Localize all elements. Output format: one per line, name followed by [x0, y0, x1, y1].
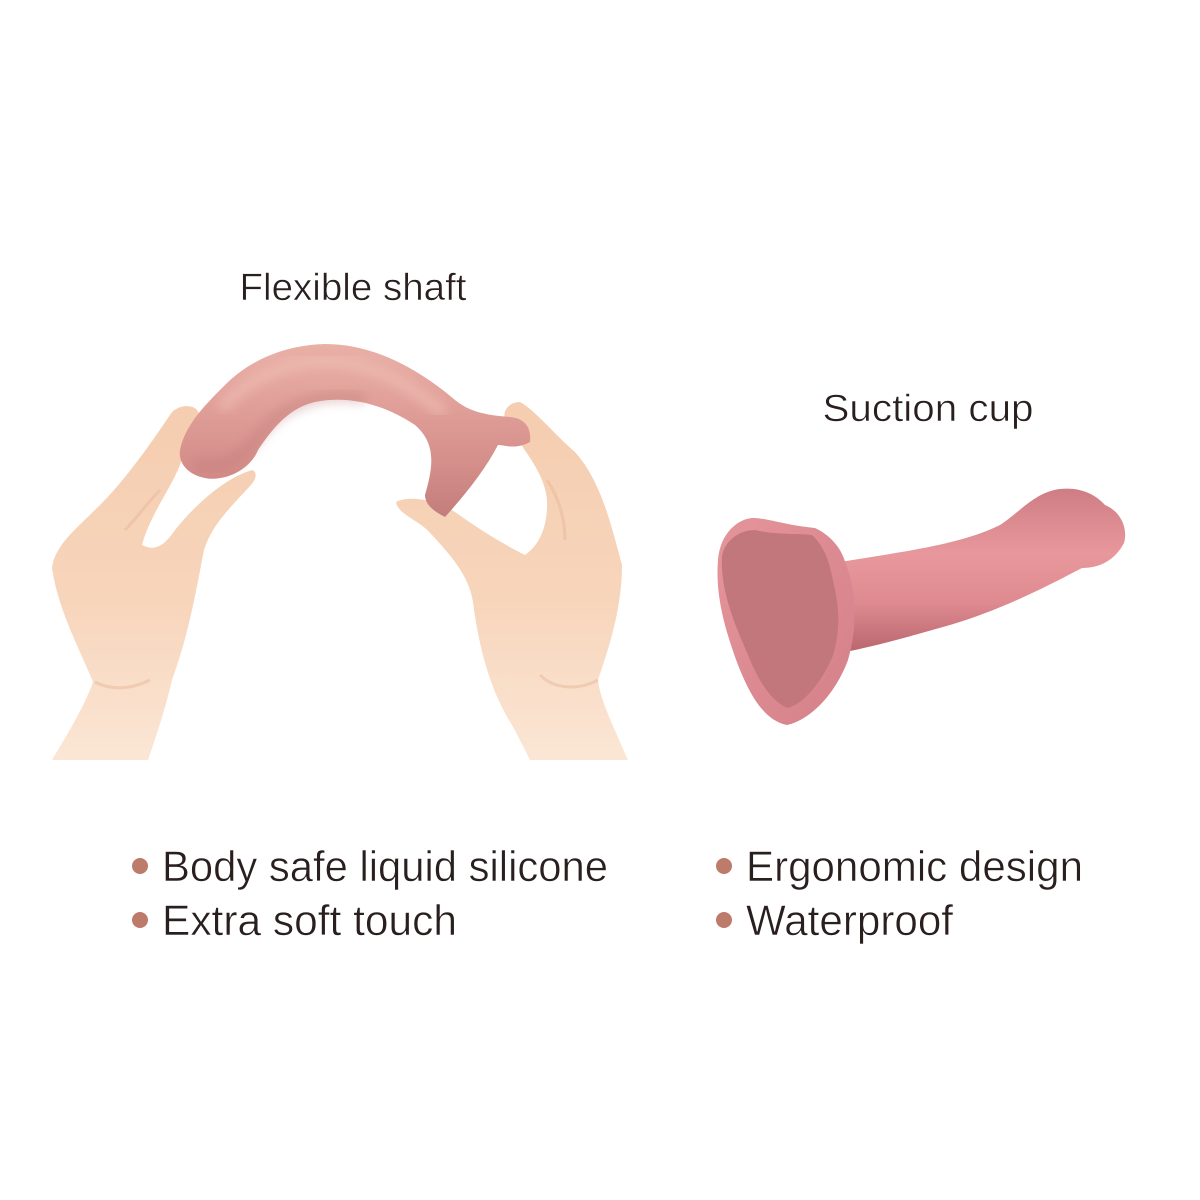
hand shading: [95, 480, 598, 688]
suction cup inner: [722, 530, 838, 708]
product shaft: [840, 489, 1125, 652]
shaft shadow band: [200, 397, 360, 466]
title: Suction cup: Suction cup: [822, 388, 1034, 430]
title: Flexible shaft: Flexible shaft: [240, 267, 467, 309]
highlight on shaft: [225, 361, 440, 410]
bullet: Waterproof: Waterproof: [746, 897, 954, 945]
illustration: suction cup product: [717, 489, 1125, 725]
bullet: Ergonomic design: Ergonomic design: [746, 843, 1083, 891]
bullet: Extra soft touch: Extra soft touch: [162, 897, 457, 945]
icon: right hand: [396, 402, 628, 760]
illustration: hands bending shaft: [52, 344, 628, 760]
icon: left hand: [52, 406, 256, 760]
icon: bent shaft: [180, 344, 530, 517]
bullet: Body safe liquid silicone: Body safe liquid silicone: [162, 843, 608, 891]
suction cup rim: [717, 518, 855, 725]
